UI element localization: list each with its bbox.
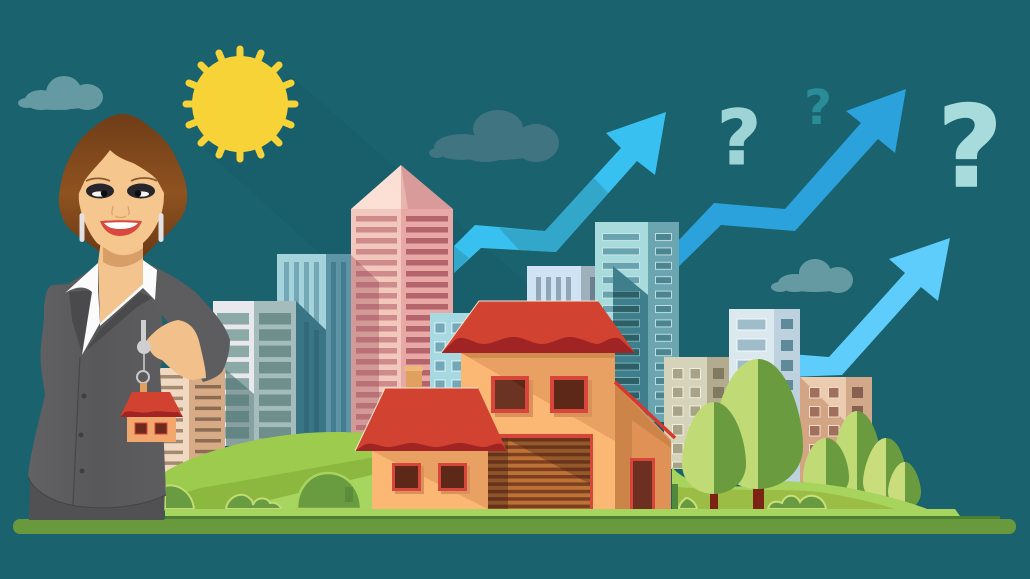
tree: large: [713, 359, 803, 510]
building: pink tower: [351, 165, 453, 433]
cloud: right: [771, 259, 853, 293]
hill: left: [163, 432, 375, 511]
window: upper left: [491, 376, 533, 417]
white right collar and placket: [100, 260, 157, 326]
building: grey block: [213, 301, 296, 446]
house: small wing: [372, 451, 488, 509]
bushes: left: [165, 485, 281, 509]
window: small right: [438, 463, 470, 494]
building: pale striped block: [527, 266, 613, 316]
arrow: growth 3: [790, 238, 950, 377]
key: [137, 320, 151, 383]
building: beige block: [664, 357, 729, 469]
door: [630, 458, 655, 509]
skirt: [29, 480, 165, 520]
jacket hem: [28, 477, 166, 508]
jacket seam: [73, 357, 80, 505]
hair: [59, 114, 187, 257]
cloud: left: [18, 76, 103, 110]
small trees group: [803, 411, 921, 510]
hill: right: [672, 467, 930, 510]
jacket arm: [150, 265, 230, 382]
jacket buttons: [78, 394, 86, 474]
building: tan block: [152, 368, 225, 472]
house: main roof: [441, 301, 635, 353]
ground: [13, 509, 1016, 534]
mouth: [100, 220, 142, 236]
bushes: right: [679, 496, 826, 509]
house: side wing: [615, 382, 675, 509]
house: chimney: [404, 366, 423, 391]
woman: agent: [28, 114, 230, 520]
earrings: [80, 213, 164, 242]
long shadow of sun: [205, 75, 740, 470]
arrow: growth 2: [660, 89, 906, 285]
neck and chest: [98, 240, 143, 323]
face: [79, 150, 164, 253]
building: teal tower: [595, 222, 679, 422]
eyes: [86, 178, 157, 198]
question mark: medium: ?: [717, 93, 761, 182]
bush: large mound: [297, 473, 361, 509]
building: light blue striped tower: [277, 254, 351, 436]
house: main building: [461, 353, 615, 509]
building: terracotta block: [800, 377, 872, 482]
tree: medium: [682, 402, 746, 510]
question mark: small: ?: [804, 80, 832, 136]
arrow: growth 1: [454, 112, 666, 273]
building: small blue block: [430, 313, 480, 393]
icon: sun: [186, 49, 295, 159]
jacket: [28, 265, 166, 508]
key-chain house: [120, 383, 183, 442]
nose: [112, 206, 129, 218]
question mark: large: ?: [938, 83, 1002, 213]
cloud: middle: [429, 110, 559, 162]
white shirt and left collar: [65, 263, 100, 355]
building: light blue block right: [729, 309, 800, 484]
garage door: [488, 434, 593, 509]
window: upper right: [550, 376, 592, 417]
house: small roof: [355, 388, 507, 451]
window: small left: [392, 463, 424, 494]
lapels: [69, 290, 92, 353]
hand: [147, 320, 206, 380]
